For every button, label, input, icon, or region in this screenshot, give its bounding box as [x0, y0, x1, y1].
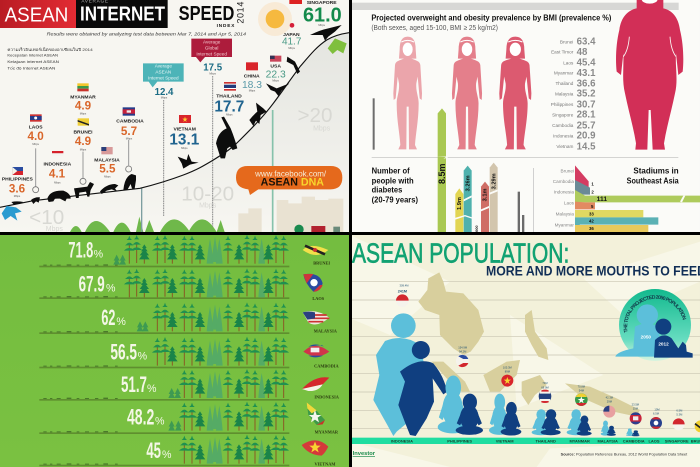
- row: Myanmar: [39, 402, 289, 434]
- flag: Laos: LAOS: [312, 296, 325, 301]
- country: Vietnam: Mbps: [181, 146, 188, 150]
- country: China: Mbps: [249, 89, 256, 93]
- country: China: CHINA: [244, 74, 260, 80]
- country: China: 18.3: [242, 80, 262, 91]
- row: Indonesia: %: [147, 383, 157, 395]
- country band: CAMBODIA: [623, 438, 645, 443]
- flag: Brunei: BRUNEI: [313, 261, 330, 266]
- country: Vietnam: [169, 115, 200, 150]
- country: USA: [266, 56, 286, 82]
- prevalence list: 63.4: [577, 37, 596, 48]
- scale bar: [373, 98, 375, 150]
- diabetes bars: 3.29m: [491, 173, 497, 189]
- woman 1: [393, 37, 422, 149]
- baby: Cambodia: [626, 428, 640, 436]
- flag: Indonesia: [302, 377, 340, 399]
- row: Vietnam: 45: [146, 438, 161, 463]
- source: Source: Population Reference Bureau, 2012 World Population Data Sheet: [561, 453, 688, 457]
- flag: Indonesia: 309.4M: [400, 284, 408, 288]
- country: Myanmar: Mbps: [80, 111, 87, 115]
- subtitle: Results were obtained by analyzing test data between Mar 7, 2014 and Apr 5, 2014: [47, 31, 246, 36]
- title banner black: [76, 0, 168, 28]
- bottom trees: [70, 217, 225, 232]
- map of Southeast Asia: [418, 272, 640, 417]
- facebook callout: ASEAN DNA: [261, 177, 324, 189]
- country: Malaysia: Mbps: [104, 175, 111, 179]
- row: Malaysia: [39, 302, 289, 334]
- flag: Laos: 10M: [654, 408, 660, 412]
- country: Japan: Mbps: [288, 46, 296, 50]
- country: Laos: 4.0: [28, 130, 44, 143]
- speed curve: [0, 33, 349, 207]
- row: Laos: 67.9: [79, 271, 105, 296]
- country: Cambodia: 5.7: [121, 125, 137, 138]
- country: Brunei: Mbps: [80, 148, 87, 152]
- top bar: [352, 3, 679, 10]
- baby: Indonesia 2050: [373, 313, 425, 436]
- country: Indonesia: 4.1: [49, 168, 66, 181]
- country: Singapore: [289, 0, 342, 28]
- baby: Indonesia 2012: [398, 341, 447, 436]
- language list: Kelajuan internet ASEAN: [7, 60, 59, 64]
- flag: Cambodia: [303, 344, 339, 368]
- title speed: 2014: [236, 2, 246, 24]
- pins: [33, 166, 132, 193]
- legend circle: [615, 289, 693, 361]
- callout: average global: Average: [203, 39, 221, 44]
- prevalence list: Singapore: [552, 112, 574, 117]
- country: Brunei: BRUNEI: [73, 129, 93, 135]
- country: Thailand: Mbps: [226, 113, 233, 117]
- stadium heading: [627, 167, 679, 185]
- stadium chart: 2: [591, 189, 594, 194]
- flag: Cambodia: [630, 403, 642, 424]
- icon: green leaf: [328, 38, 347, 54]
- flag: Singapore: [673, 409, 685, 430]
- country: Laos: [28, 114, 44, 146]
- language list: [7, 46, 94, 70]
- flag: Indonesia: INDONESIA: [314, 394, 340, 399]
- stadium chart: Myanmar: [555, 223, 574, 228]
- language list: Kecepatan Internet ASEAN: [7, 53, 58, 57]
- prevalence list: Brunei: [560, 39, 573, 44]
- diabetes heading: people with: [372, 176, 414, 185]
- baby: Myanmar: [567, 409, 592, 436]
- flag: Malaysia: [603, 396, 615, 418]
- prevalence list: Indonesia: [553, 133, 574, 138]
- prevalence list: Thailand: [555, 81, 574, 86]
- stadium chart: 1: [591, 182, 594, 187]
- country: USA: USA: [270, 63, 281, 69]
- title banner red: ASEAN: [5, 5, 68, 27]
- flag: Myanmar: [575, 385, 588, 406]
- language list: Tốc độ Internet ASEAN: [7, 66, 56, 70]
- country: Indonesia: INDONESIA: [43, 162, 72, 168]
- callout: average global: Internet Speed: [196, 51, 227, 56]
- prevalence list: 28.1: [577, 110, 596, 121]
- country: Laos: LAOS: [29, 125, 43, 131]
- diabetes bars: [436, 108, 524, 232]
- country: Philippines: Mbps: [14, 194, 21, 198]
- country: Brunei: 4.9: [75, 135, 92, 148]
- ruled lines: [352, 281, 700, 429]
- prevalence list: Philippines: [551, 102, 574, 107]
- diabetes bars: 8.5m: [437, 164, 447, 184]
- country: Laos: Mbps: [32, 142, 40, 146]
- panel: obesity and diabetes: [352, 0, 700, 232]
- row: Brunei: 71.8: [68, 238, 93, 263]
- stadium chart: 36: [589, 226, 594, 231]
- row: Cambodia: 56.5: [110, 340, 137, 365]
- prevalence list: 48: [577, 47, 588, 58]
- country: Thailand: [214, 82, 244, 117]
- row: Laos: %: [106, 282, 116, 294]
- callout: average global: Global: [205, 45, 218, 50]
- facebook callout: [236, 166, 342, 195]
- prevalence list: 45.4: [577, 58, 596, 69]
- prevalence list: Myanmar: [554, 71, 574, 76]
- vertical divider: [533, 168, 535, 232]
- heading: [371, 13, 612, 32]
- diabetes heading: [372, 167, 418, 204]
- icon: sun: [258, 2, 292, 36]
- country band: SINGAPORE: [665, 438, 689, 443]
- flag: Philippines: 94.2M: [459, 349, 466, 353]
- country band: VIETNAM: [496, 438, 514, 443]
- row: Vietnam: %: [162, 449, 172, 461]
- speed bands: 10-20: [181, 182, 234, 205]
- title speed: INDEX: [217, 23, 235, 28]
- prevalence list: Vietnam: [556, 144, 573, 149]
- callout: average ASEAN: Average: [155, 64, 172, 69]
- row: Brunei: [39, 235, 289, 267]
- row: Cambodia: [39, 337, 289, 368]
- flag: Vietnam: VIETNAM: [315, 462, 335, 467]
- panel: forest cover: [0, 235, 349, 467]
- guide lines: [36, 76, 273, 232]
- prevalence list: East Timor: [551, 50, 574, 55]
- flag: Brunei: [695, 420, 700, 432]
- icon: animal silhouettes: [11, 25, 342, 204]
- baby: Vietnam: [489, 394, 521, 436]
- flag: Indonesia: 241M: [398, 289, 407, 293]
- stadium chart: Malaysia: [556, 211, 574, 216]
- prevalence list: 36.6: [577, 78, 596, 89]
- country: Thailand: THAILAND: [216, 93, 242, 99]
- diabetes bars: 000: [474, 225, 479, 232]
- diabetes heading: Number of: [372, 167, 410, 176]
- legend circle: 2050: [641, 335, 651, 340]
- stadium chart: Laos: [564, 200, 575, 205]
- stadium chart: 111: [597, 196, 607, 203]
- row: Malaysia: %: [116, 316, 126, 328]
- stadium heading: Southeast Asia: [627, 176, 679, 185]
- flag: Thailand: 71M: [542, 381, 548, 385]
- flag: Philippines: 154.9M: [458, 345, 467, 349]
- callout: average global: Mbps: [209, 71, 217, 75]
- diabetes bars: 3.26m: [465, 175, 471, 191]
- country: Japan: JAPAN: [283, 32, 300, 38]
- baby: Malaysia: [601, 420, 616, 436]
- row: Indonesia: [39, 369, 289, 401]
- country band: MALAYSIA: [597, 438, 618, 443]
- diabetes heading: diabetes: [372, 186, 403, 195]
- flag: Laos: 6.5M: [653, 411, 659, 415]
- baby: Thailand: [532, 409, 561, 435]
- speed bands: >20: [297, 104, 333, 127]
- title: ASEAN POPULATION:: [352, 237, 569, 268]
- legend circle: THE TOTAL PROJECTED 2050 POPULATION: [624, 295, 686, 333]
- heading: (Both sexes, aged 15-100, BMI ≥ 25 kg/m2): [371, 23, 498, 32]
- flag: Myanmar: 70.8M: [578, 385, 585, 389]
- flag: Vietnam: [302, 440, 335, 467]
- row: Myanmar: 48.2: [127, 405, 154, 430]
- country: Cambodia: CAMBODIA: [116, 118, 144, 124]
- country: Japan: 41.7: [282, 37, 302, 48]
- callout: average ASEAN: 12.4: [155, 87, 174, 98]
- flag: Cambodia: 23.5M: [632, 403, 639, 407]
- row: Cambodia: %: [138, 351, 148, 363]
- callout: average ASEAN: Internet Speed: [148, 75, 179, 80]
- speed bands: <10: [29, 206, 64, 229]
- language list: ความเร็วอินเทอร์เน็ตของอาเซียนในปี 2014: [7, 46, 94, 52]
- flag: Myanmar: [307, 402, 339, 435]
- facebook callout: www.facebook.com/: [254, 169, 327, 178]
- panel: ASEAN population: [352, 235, 700, 467]
- country: USA: Mbps: [272, 78, 280, 82]
- country: Indonesia: [43, 151, 72, 185]
- row: Brunei: %: [94, 248, 104, 260]
- speed bands: Mbps: [46, 226, 63, 233]
- country: Philippines: [2, 167, 34, 198]
- country: Indonesia: Mbps: [54, 181, 61, 185]
- country: Singapore: Mbps: [318, 23, 326, 27]
- callout: average ASEAN: [143, 63, 184, 100]
- flag: Malaysia: 29M: [607, 400, 612, 404]
- country: Myanmar: [70, 83, 96, 115]
- flag: Laos: [650, 408, 662, 429]
- callout: average ASEAN: Mbps: [161, 96, 168, 100]
- country: China: [242, 62, 262, 93]
- woman 2: [452, 37, 482, 149]
- row: Laos: [39, 268, 289, 299]
- stadium chart: Cambodia: [553, 179, 574, 184]
- callout: average global: 17.5: [203, 63, 223, 74]
- flag: Malaysia: 42.3M: [606, 396, 613, 400]
- row: Myanmar: %: [155, 416, 165, 428]
- speed bands: [29, 104, 333, 233]
- prevalence list: 43.1: [577, 68, 596, 79]
- callout: average ASEAN: ASEAN: [155, 69, 171, 74]
- flag: Myanmar: 54M: [579, 389, 584, 393]
- callout: average global: [191, 39, 232, 75]
- country: Cambodia: [116, 107, 144, 140]
- flag: Brunei: [303, 246, 330, 266]
- country: Cambodia: Mbps: [126, 136, 133, 140]
- row: Malaysia: 62: [101, 305, 115, 330]
- prevalence list: 25.7: [577, 120, 595, 131]
- stadium chart: [553, 165, 700, 232]
- skyline: [238, 197, 343, 232]
- flag: Philippines: [456, 345, 469, 367]
- country: Singapore: 61.0: [303, 4, 342, 27]
- flag: Singapore: 5.3M: [676, 413, 682, 417]
- prevalence list: Laos: [563, 60, 574, 65]
- flag: Vietnam: [501, 365, 513, 387]
- prevalence list: Malaysia: [555, 91, 574, 96]
- woman 4 obese: [616, 0, 683, 150]
- stadium chart: 5: [591, 204, 594, 209]
- flag: Malaysia: [303, 311, 338, 333]
- country band: [352, 438, 700, 444]
- country: USA: 22.3: [266, 69, 286, 80]
- country: Malaysia: 5.5: [99, 163, 116, 176]
- country band: THAILAND: [535, 438, 556, 443]
- bottom icons: [294, 224, 340, 232]
- stadium chart: Brunei: [561, 168, 574, 173]
- speed bands: Mbps: [313, 126, 331, 133]
- flag: Vietnam: 105.3M: [503, 365, 512, 369]
- background facets: [350, 235, 700, 467]
- diabetes bars: 1.9m: [457, 197, 463, 210]
- flag: Indonesia: [396, 284, 409, 307]
- heading: Projected overweight and obesity prevalence by BMI (prevalence %): [371, 13, 612, 22]
- row: Indonesia: 51.7: [121, 372, 147, 397]
- stadium heading: Stadiums in: [633, 167, 679, 176]
- flag: Cambodia: CAMBODIA: [314, 363, 339, 368]
- country: Philippines: PHILIPPINES: [2, 177, 34, 183]
- speed bands: Mbps: [199, 202, 217, 209]
- diabetes bars: 3.1m: [483, 188, 489, 201]
- country: Myanmar: 4.9: [75, 100, 92, 113]
- woman 3: [499, 37, 531, 149]
- diabetes heading: (20-79 years): [372, 195, 418, 204]
- hill under speed curve: [237, 34, 349, 148]
- country band: LAOS: [648, 438, 660, 443]
- stadium chart: 33: [589, 211, 594, 216]
- country band: PHILIPPINES: [447, 438, 472, 443]
- country: Vietnam: 13.1: [169, 132, 200, 149]
- country: Philippines: 3.6: [9, 183, 26, 196]
- prevalence list: [551, 37, 596, 152]
- flag: Thailand: [539, 381, 551, 403]
- country: Thailand: 17.7: [214, 98, 244, 115]
- country: Myanmar: MYANMAR: [70, 94, 96, 100]
- country band: MYANMAR: [569, 438, 590, 443]
- country: Malaysia: MALAYSIA: [94, 157, 120, 163]
- flag: Singapore: 6.5M: [676, 409, 682, 413]
- flag: Myanmar: MYANMAR: [315, 430, 339, 435]
- country: Singapore: SINGAPORE: [307, 0, 337, 6]
- prevalence list: 20.9: [577, 131, 596, 142]
- country: Japan: [282, 33, 301, 50]
- country band: INDONESIA: [391, 438, 413, 443]
- flag: Laos: [303, 274, 325, 301]
- country: Brunei: [73, 118, 93, 152]
- flag: Thailand: 69.9M: [541, 385, 549, 389]
- prevalence list: 30.7: [577, 99, 595, 110]
- icon: blue leaf: [2, 206, 22, 221]
- flag: Vietnam: 89M: [505, 369, 510, 373]
- divider: [372, 156, 678, 158]
- baby: Philippines: [438, 375, 483, 435]
- row: Vietnam: [39, 435, 289, 466]
- prevalence list: Cambodia: [552, 123, 574, 128]
- stadium chart: Indonesia: [554, 190, 574, 195]
- prevalence list: 14.5: [577, 141, 596, 152]
- country: Malaysia: [94, 147, 120, 179]
- title speed: SPEED: [179, 2, 234, 25]
- prevalence list: 35.2: [577, 89, 595, 100]
- stadium chart: 42: [589, 219, 594, 224]
- title banner black: INTERNET: [80, 4, 165, 26]
- flag: Cambodia: 15M: [633, 407, 638, 411]
- flag: Malaysia: MALAYSIA: [314, 328, 338, 333]
- country: Vietnam: VIETNAM: [173, 127, 196, 133]
- logo: Investor: [353, 451, 375, 457]
- legend circle: 2012: [658, 341, 669, 346]
- panel: ASEAN internet speed index: [0, 0, 349, 234]
